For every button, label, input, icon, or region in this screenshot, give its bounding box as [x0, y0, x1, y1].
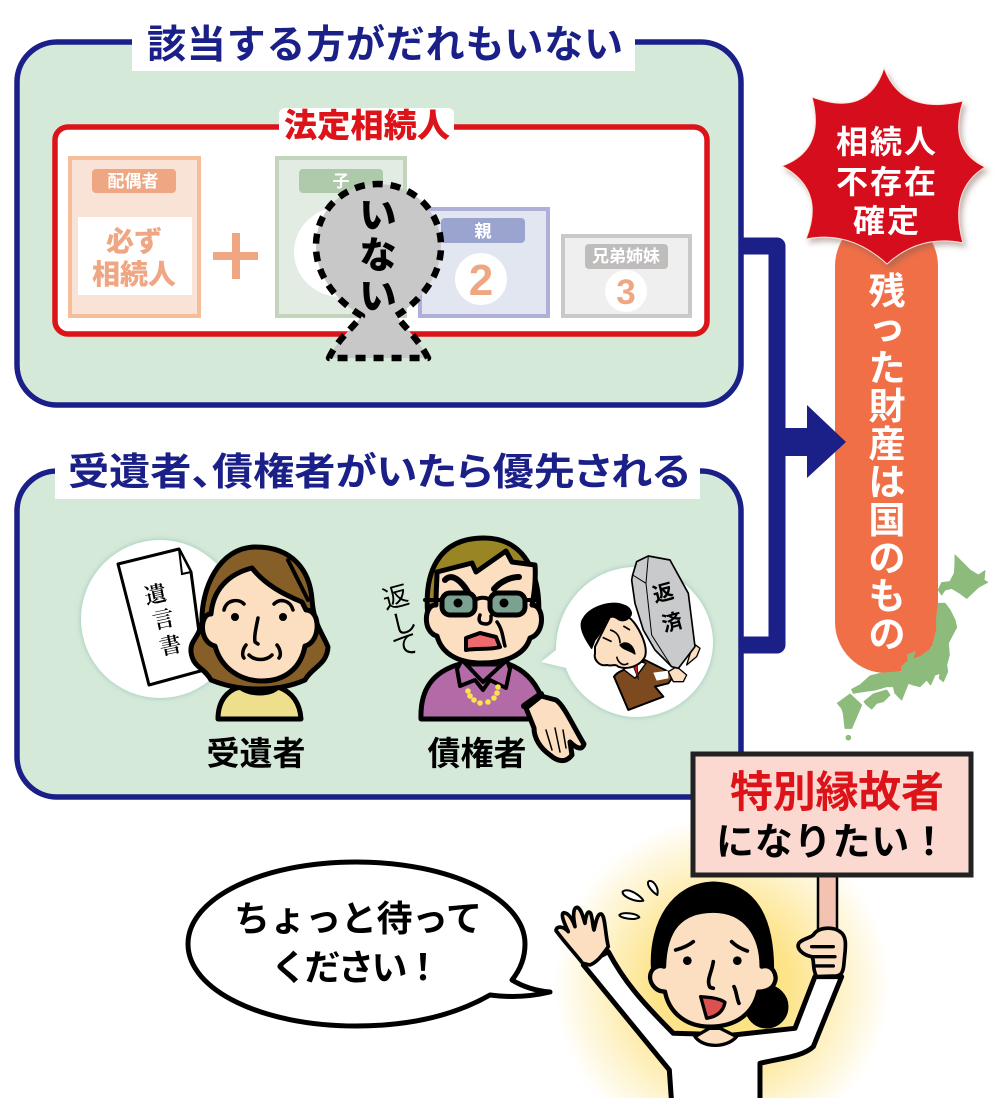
panel: legatees and creditors: [17, 446, 741, 797]
illustration: creditor man: [421, 538, 584, 761]
panel: no heirs: [17, 22, 741, 405]
icon: businessman carrying a debt stone: 済: [659, 609, 686, 637]
illustration: will bubble: [81, 540, 239, 698]
card: parent: [420, 209, 548, 316]
illustration: will bubble: 言: [150, 605, 177, 634]
card: siblings: 3: [616, 273, 636, 312]
label: legatee: 受遺者: [206, 735, 306, 772]
icon: absent person silhouette: な: [360, 235, 396, 276]
card: child: 子: [332, 172, 350, 191]
sign pole: [818, 874, 837, 935]
result pill: assets go to the state: も: [868, 576, 906, 617]
result pill: assets go to the state: 財: [868, 386, 906, 427]
card: spouse: 必ず: [106, 226, 162, 257]
card: spouse: 配偶者: [108, 172, 158, 191]
sign: [693, 754, 971, 875]
speech bubble: ちょっと待って: [234, 898, 482, 939]
illustration: creditor speech bubble: [541, 556, 713, 717]
burst: no heir confirmed: [782, 68, 985, 264]
result pill: assets go to the state: た: [868, 348, 906, 389]
illustration: will bubble: 遺: [142, 580, 170, 609]
result pill: assets go to the state: の: [868, 538, 906, 579]
icon: plus: [213, 233, 258, 279]
panel: statutory heirs: [55, 107, 707, 334]
sign: 特別縁故者: [730, 769, 944, 817]
text: return it: て: [389, 627, 422, 663]
arrow to result: [782, 405, 846, 478]
heading: legatees and creditors take priority: 受遺者、債権者がいたら優先される: [68, 452, 690, 494]
icon: absent person silhouette: い: [360, 195, 396, 236]
card: siblings: 兄弟姉妹: [592, 247, 660, 266]
text: return it: し: [387, 605, 420, 641]
result pill: assets go to the state: 国: [868, 500, 906, 541]
result pill: assets go to the state: 産: [868, 424, 906, 465]
card: parent: 2: [469, 256, 493, 305]
card: spouse: 相続人: [92, 259, 176, 290]
speech bubble: ください！: [271, 947, 441, 988]
burst: no heir confirmed: 不存在: [836, 164, 938, 200]
card: spouse: [70, 158, 199, 316]
heading: statutory heirs: 法定相続人: [284, 107, 450, 144]
text: return it: 返: [379, 579, 412, 615]
card: siblings: [563, 236, 690, 316]
illustration: legatee woman: [191, 547, 328, 719]
card: child: [277, 158, 405, 316]
connector: bracket joining both panels: [741, 246, 777, 645]
card: parent: 親: [474, 222, 492, 241]
burst: no heir confirmed: 相続人: [836, 124, 938, 160]
text: return it: [379, 579, 422, 663]
result pill: assets go to the state: っ: [868, 307, 906, 348]
icon: businessman carrying a debt stone: 返: [650, 580, 677, 607]
icon: absent person silhouette: い: [360, 276, 396, 317]
map of Japan: [837, 555, 988, 740]
heading: no applicable person: 該当する方がだれもいない: [147, 24, 623, 67]
speech bubble: [188, 862, 550, 1026]
result pill: assets go to the state: は: [868, 462, 906, 503]
result pill: assets go to the state: 残: [868, 271, 906, 312]
illustration: will bubble: 書: [157, 631, 184, 660]
sign: になりたい！: [716, 822, 948, 864]
icon: absent person silhouette: [316, 184, 441, 358]
result pill: assets go to the state: の: [868, 614, 906, 655]
result pill: assets go to the state: [835, 215, 938, 673]
glow behind woman: [550, 815, 895, 1098]
icon: businessman carrying a debt stone: [581, 556, 700, 710]
burst: no heir confirmed: 確定: [853, 203, 921, 239]
illustration: woman raising her hands: [556, 881, 845, 1098]
label: creditor: 債権者: [428, 735, 526, 772]
